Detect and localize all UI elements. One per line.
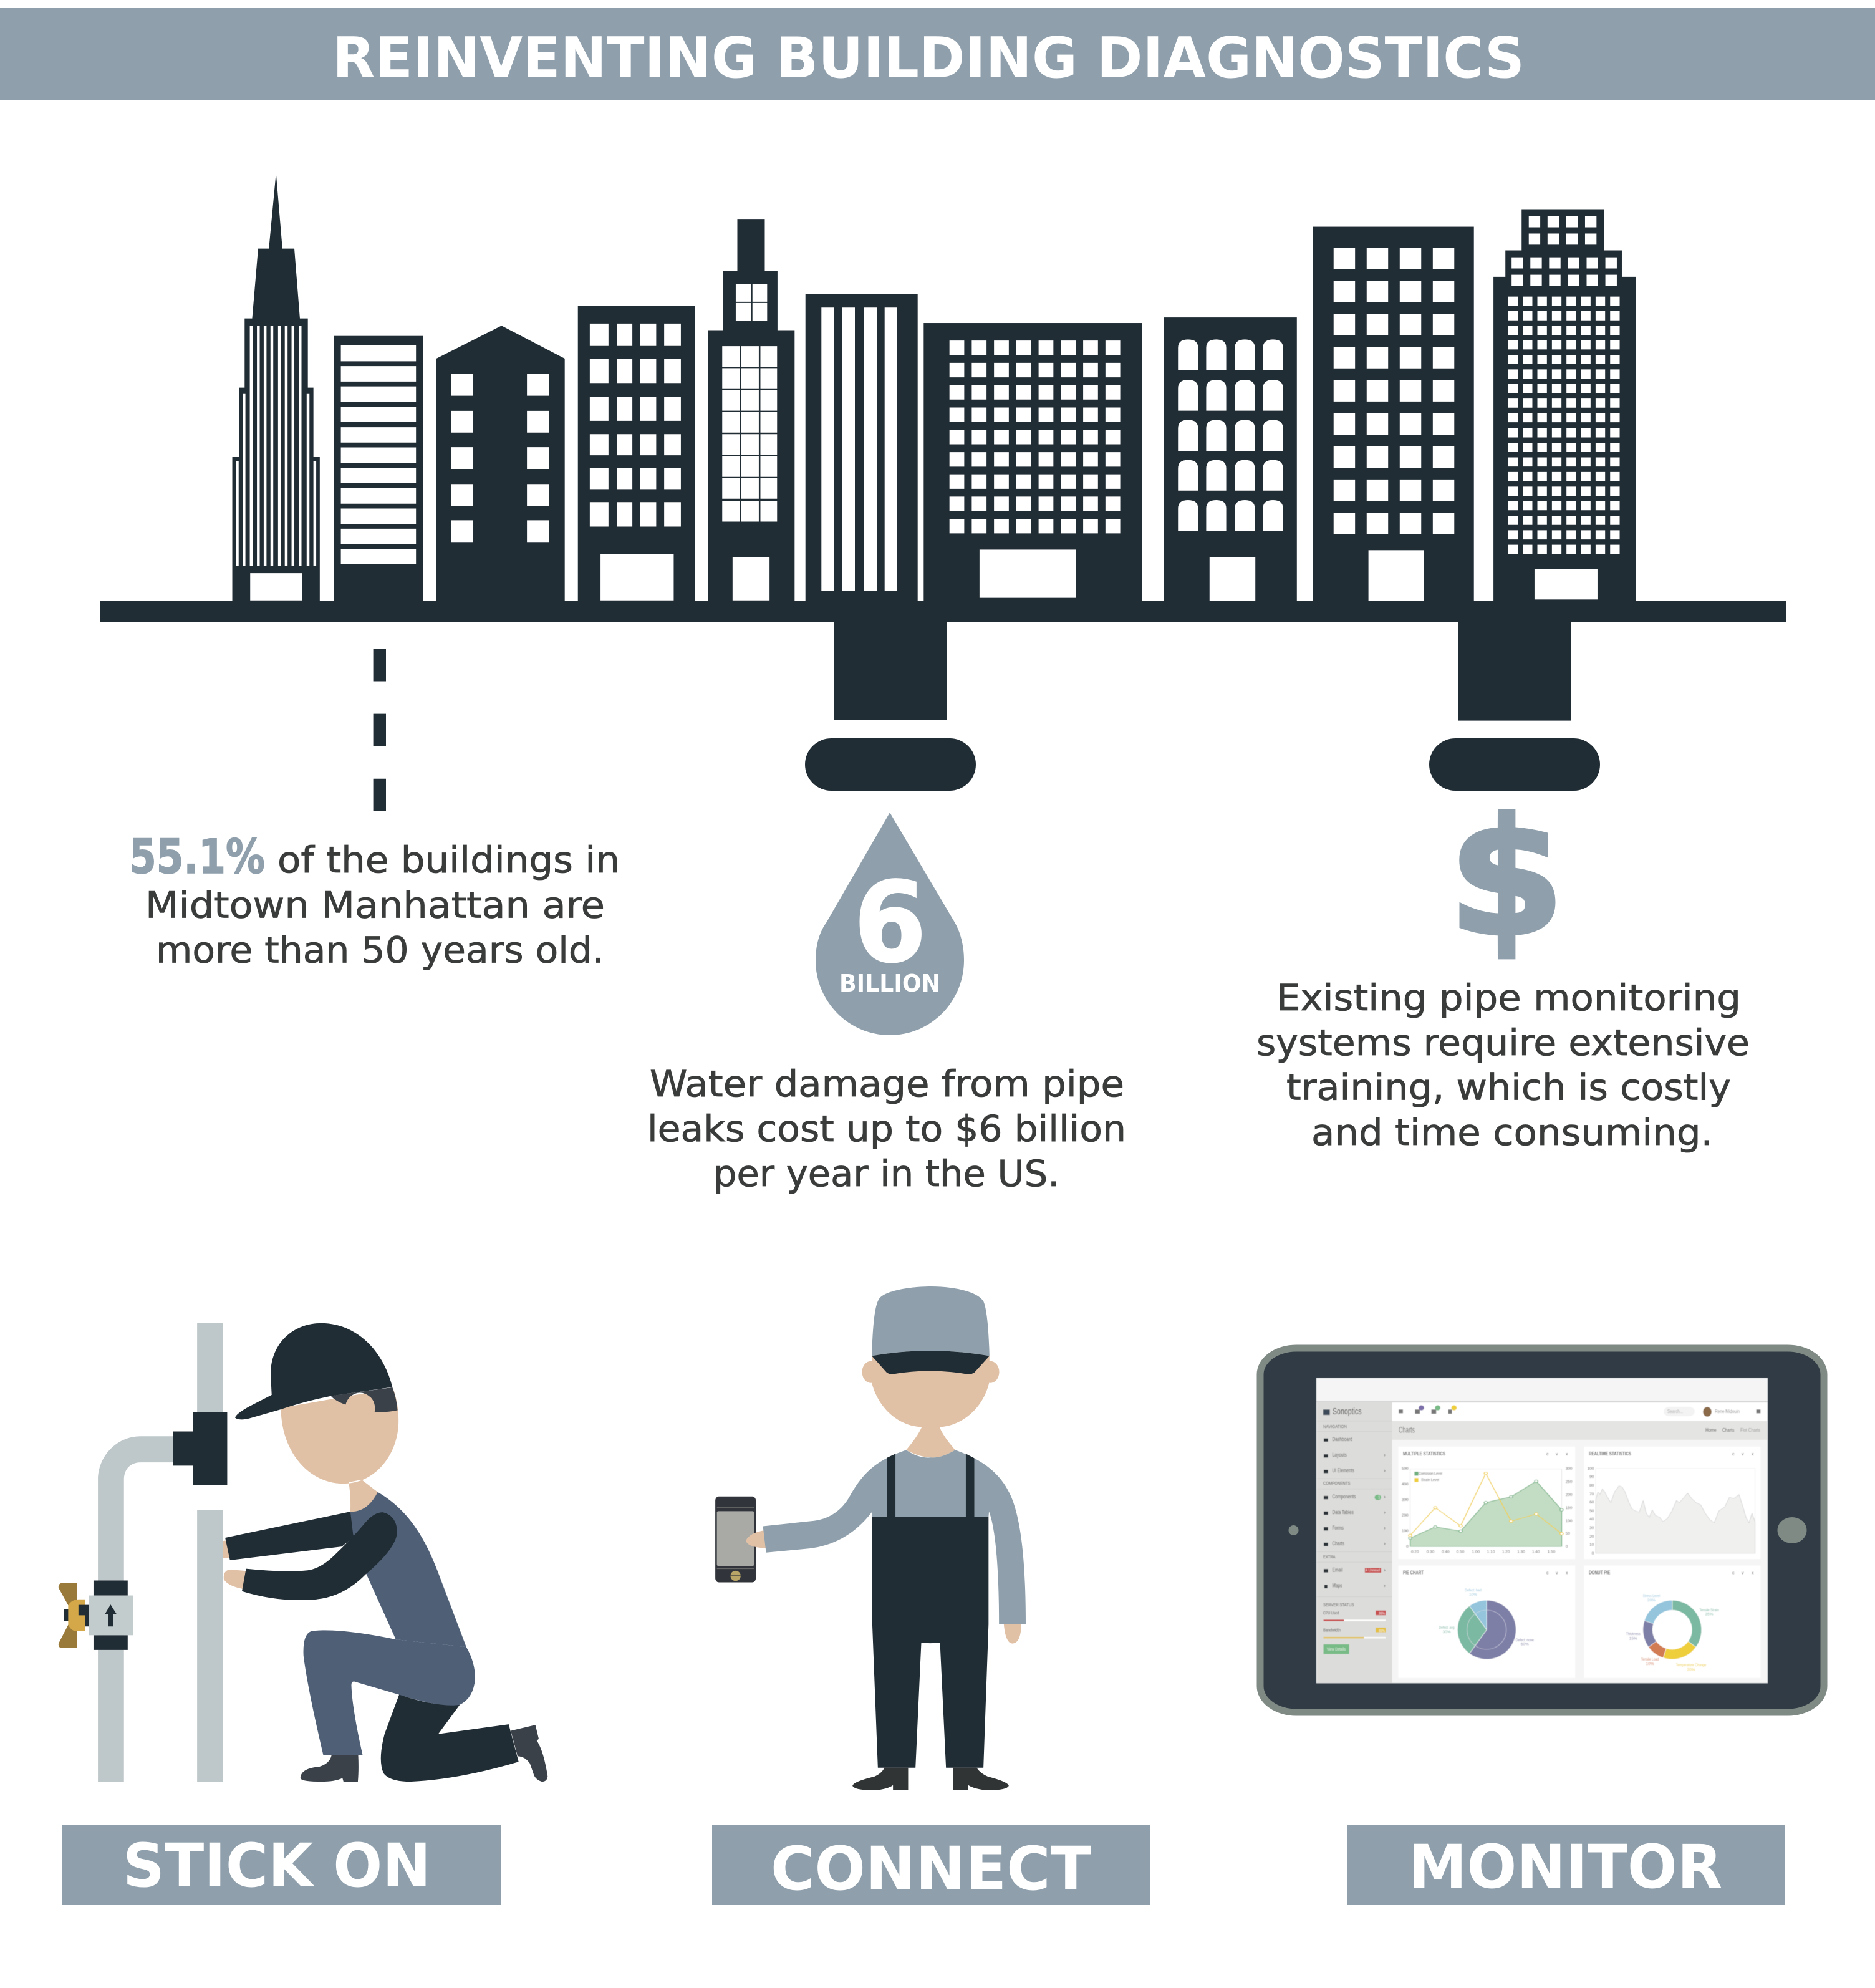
panel controls: v [1742,1571,1744,1576]
chart axis labels [1402,1467,1594,1556]
header labels [1399,1408,1760,1434]
sidebar labels: › [1384,1509,1386,1515]
header labels: Search... [1667,1408,1683,1414]
chart axis labels: 100 [1402,1529,1409,1533]
header labels: Charts [1722,1427,1734,1433]
multiple statistics chart [1409,1469,1563,1546]
hat [872,1286,990,1356]
chart axis labels: 250 [1566,1480,1573,1484]
chart axis labels: 400 [1402,1482,1409,1487]
sidebar labels: Layouts [1332,1452,1347,1458]
building: banded block [334,336,423,602]
pie and donut labels [1439,1588,1719,1672]
chart axis labels: 1:00 [1472,1550,1480,1554]
dashboard screen [1316,1378,1768,1683]
tablet body [1260,1348,1824,1712]
sidebar labels: Charts [1332,1540,1344,1546]
sidebar labels: 1 [1378,1496,1381,1500]
chart axis labels: 100 [1587,1467,1594,1471]
header labels: Flot Charts [1740,1427,1760,1433]
stat: training cost [1256,977,1750,1154]
panel titles: MULTIPLE STATISTICS [1403,1451,1446,1457]
cap [235,1323,392,1419]
buildings right half [923,209,1636,602]
chart axis labels: 90 [1589,1475,1594,1479]
panel controls: v [1556,1571,1558,1576]
header labels: Charts [1399,1424,1415,1434]
pie and donut labels: 60% [1521,1643,1529,1646]
header labels: Rene Midouin [1715,1408,1740,1414]
tablet home button [1777,1517,1807,1543]
sidebar labels: Bandwidth [1323,1628,1341,1633]
sidebar labels: NAVIGATION [1323,1425,1347,1429]
pie and donut labels: 20% [1647,1598,1656,1603]
chart axis labels: 500 [1402,1467,1409,1471]
chart axis labels: 50 [1566,1532,1570,1536]
label: connect: CONNECT [771,1834,1091,1904]
stat: 55.1 percent of buildings: Midtown Manhattan are [145,884,605,927]
sidebar labels: › [1384,1567,1386,1573]
panel controls: c [1546,1452,1549,1457]
chart axis labels: 50 [1589,1509,1594,1513]
torso [350,1492,466,1647]
front leg [304,1630,475,1755]
pie and donut labels: Stress Level [1643,1594,1661,1598]
chart axis labels: 0:40 [1442,1550,1450,1554]
panel titles: PIE CHART [1403,1570,1424,1576]
skyline with ground line [100,173,1786,622]
stat: training cost: training, which is costly [1286,1066,1731,1109]
sidebar labels: Data Tables [1332,1509,1354,1515]
panel controls [1546,1452,1754,1576]
panel controls: x [1752,1571,1754,1576]
chart axis labels: 0 [1566,1545,1568,1549]
visor [872,1351,990,1374]
sidebar labels [1323,1406,1386,1652]
icon: dollar sign: $ [1448,784,1564,972]
label: stick on [62,1825,501,1905]
broken pipe: monitoring cost [1429,617,1600,791]
icon: water drop 6 billion: BILLION [839,970,940,997]
sidebar labels: EXTRA [1323,1555,1336,1560]
chart axis labels: Strain Level [1421,1478,1439,1482]
chart axis labels: 300 [1566,1467,1573,1471]
panels [1399,1447,1760,1678]
chart axis labels: 1:20 [1502,1550,1510,1554]
stat: water damage cost: Water damage from pipe [650,1063,1124,1105]
stat: training cost: and time consuming. [1311,1111,1713,1154]
building: tall offices [1313,227,1474,602]
pie and donut labels: Thickness [1626,1632,1641,1636]
chart axis labels: 10 [1589,1543,1594,1547]
chart axis labels: 1:10 [1487,1550,1495,1554]
panel controls: v [1556,1452,1558,1457]
title: REINVENTING BUILDING DIAGNOSTICS [332,26,1525,91]
chart axis labels: 1:30 [1517,1550,1525,1554]
building: gabled house [436,326,565,602]
chart axis labels: 0 [1592,1551,1594,1556]
pie and donut labels: Tensile Load [1641,1657,1659,1662]
sidebar labels: COMPONENTS [1323,1482,1351,1486]
broken pipe: water damage [805,617,976,791]
dashed pipe: old buildings [374,649,386,811]
sidebar labels: UI Elements [1332,1467,1354,1474]
buildings left half [233,173,794,602]
sidebar labels: Sonoptics [1333,1406,1362,1417]
phone [715,1497,756,1582]
sidebar labels: Components [1332,1493,1356,1500]
sidebar labels: Email [1332,1567,1343,1573]
sidebar labels: › [1384,1525,1386,1531]
title banner [0,8,1875,100]
illustration: worker connecting with phone [715,1286,1026,1790]
top bar [1392,1402,1767,1440]
sidebar labels: › [1384,1493,1386,1500]
hands [223,1540,246,1589]
pie and donut labels: Temperature Change [1676,1663,1707,1667]
realtime statistics chart [1596,1469,1755,1553]
overalls [872,1454,988,1768]
chart axis labels: 60 [1589,1500,1594,1505]
sidebar labels: 65% [1379,1629,1386,1633]
pie and donut labels: 20% [1687,1667,1695,1672]
sidebar labels: SERVER STATUS [1323,1603,1354,1608]
chart axis labels: 0 [1406,1545,1409,1549]
sensor valve [59,1580,133,1650]
stat: water damage cost: per year in the US. [713,1152,1059,1195]
icon: water drop 6 billion [816,813,964,1035]
building: clock tower [708,219,794,602]
label: stick on: STICK ON [123,1831,431,1901]
stat: training cost: systems require extensive [1256,1021,1750,1064]
chart axis labels: 150 [1566,1506,1573,1510]
label: monitor: MONITOR [1409,1832,1722,1902]
face and neck [872,1356,990,1457]
hair [331,1387,398,1412]
head [281,1388,398,1512]
boots [301,1725,547,1782]
chart axis labels: 0:20 [1411,1550,1419,1554]
stat: 55.1 percent of buildings [129,829,620,972]
icon: water drop 6 billion: 6 [854,858,927,987]
rear leg [381,1694,519,1782]
hands [746,1530,1021,1644]
building: stepped skyscraper [1493,209,1636,602]
sidebar labels: 4 Unread [1366,1569,1380,1573]
pie and donut labels: 15% [1629,1636,1637,1641]
shirt [763,1450,1026,1624]
donut chart [1643,1600,1702,1659]
tablet camera [1288,1525,1298,1535]
sidebar [1317,1402,1392,1683]
chart axis labels: 200 [1402,1513,1409,1518]
panel controls: c [1546,1571,1549,1576]
chart axis labels: 70 [1589,1492,1594,1497]
chart axis labels: 80 [1589,1484,1594,1488]
chart axis labels: Corrosion Level [1419,1472,1442,1476]
sidebar labels: › [1384,1452,1386,1458]
chart axis labels: 1:40 [1532,1550,1540,1554]
chart axis labels: 40 [1589,1517,1594,1522]
near arm [242,1512,397,1600]
panel titles [1403,1451,1632,1576]
building: four column offices [578,306,695,602]
panel titles: DONUT PIE [1589,1570,1611,1576]
sidebar labels: Forms [1332,1525,1344,1531]
chart axis labels: 100 [1566,1519,1573,1523]
ground line [100,601,1786,622]
ears [862,1361,999,1383]
chart axis labels: 0:30 [1427,1550,1435,1554]
sidebar labels: › [1384,1467,1386,1474]
pie and donut labels: Defect: bad [1465,1588,1482,1593]
stat: 55.1 percent of buildings: of the buildings in [277,839,620,881]
sidebar labels: › [1384,1540,1386,1546]
building: arched windows [1164,317,1297,602]
illustration: worker sticking sensor on pipe [59,1323,547,1782]
building: spire tower [233,173,320,602]
panel controls: c [1732,1452,1735,1457]
chart axis labels: 30 [1589,1526,1594,1530]
pie and donut labels: 30% [1442,1630,1451,1634]
pipes [98,1323,227,1782]
header labels: Home [1705,1427,1717,1433]
sidebar labels: Maps [1332,1583,1342,1589]
building: striped tower [806,294,918,602]
pie and donut labels: Tensile Strain [1699,1608,1719,1613]
pie chart [1457,1600,1516,1659]
chart axis labels: 200 [1566,1493,1573,1497]
chart axis labels: 1:50 [1548,1550,1556,1554]
panel controls: x [1566,1452,1568,1457]
pie and donut labels: 10% [1646,1662,1654,1666]
panel controls: c [1732,1571,1735,1576]
panel titles: REALTIME STATISTICS [1589,1451,1632,1457]
chart axis labels: 0:50 [1457,1550,1465,1554]
panel controls: v [1742,1452,1744,1457]
pie and donut labels: 10% [1469,1593,1477,1597]
chart axis labels: 20 [1589,1535,1594,1539]
stat: water damage cost [647,1063,1126,1195]
sidebar labels: CPU Used [1323,1610,1339,1616]
shoes [852,1768,1009,1790]
sidebar labels: › [1384,1583,1386,1589]
label: connect [712,1825,1150,1905]
sidebar labels: Dashboard [1332,1436,1352,1442]
pie and donut labels: Defect: none [1516,1638,1534,1643]
chart axis labels: 300 [1402,1498,1409,1502]
pie and donut labels: 35% [1705,1613,1714,1616]
stat: water damage cost: leaks cost up to $6 billion [647,1107,1126,1150]
stat: 55.1 percent of buildings: 55.1% [129,829,265,884]
building: wide grid block [923,323,1142,602]
tablet with dashboard [1260,1348,1824,1712]
far arm [225,1512,357,1560]
label: monitor [1347,1825,1785,1905]
sidebar labels: 33% [1379,1612,1386,1616]
stat: training cost: Existing pipe monitoring [1276,977,1741,1019]
pie and donut labels: Defect: avg [1439,1626,1455,1630]
panel controls: x [1752,1452,1754,1457]
panel controls: x [1566,1571,1568,1576]
stat: 55.1 percent of buildings: more than 50 years old. [156,929,604,972]
sidebar labels: View Details [1327,1646,1346,1652]
dashboard shapes [1316,1378,1768,1683]
